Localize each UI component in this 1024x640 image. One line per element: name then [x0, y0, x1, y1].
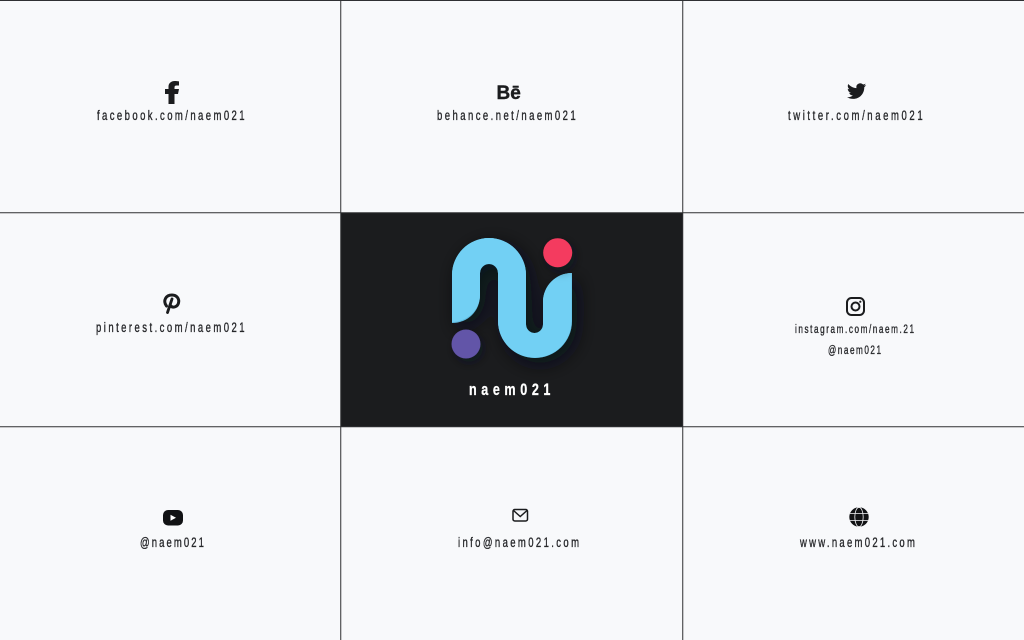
icon: pinterest [165, 295, 179, 312]
icon: mail [513, 510, 528, 521]
instagram label: instagram.com/naem.21 [795, 324, 914, 337]
panel: instagram [795, 298, 914, 358]
panel: youtube [140, 510, 204, 551]
panel: pinterest [96, 295, 245, 336]
instagram handle: @naem021 [828, 345, 881, 358]
panel: email [458, 510, 579, 551]
icon: behance: Bē [496, 83, 521, 104]
icon: youtube [163, 510, 183, 526]
email label: info@naem021.com [458, 534, 579, 551]
twitter label: twitter.com/naem021 [788, 107, 923, 124]
pinterest label: pinterest.com/naem021 [96, 319, 245, 336]
icon: twitter [847, 83, 866, 99]
brand name: naem021 [469, 380, 550, 400]
panel: brand logo [341, 213, 683, 427]
behance label: behance.net/naem021 [437, 107, 576, 124]
facebook label: facebook.com/naem021 [97, 107, 245, 124]
icon: globe [849, 507, 869, 527]
panel: website [799, 507, 915, 551]
panel: behance [437, 83, 576, 124]
icon: facebook [165, 81, 179, 104]
panel: twitter [788, 83, 923, 124]
panel: facebook [97, 81, 245, 124]
youtube label: @naem021 [140, 534, 204, 551]
logo mark [452, 238, 572, 358]
icon: instagram [847, 298, 864, 315]
website label: www.naem021.com [799, 534, 915, 551]
